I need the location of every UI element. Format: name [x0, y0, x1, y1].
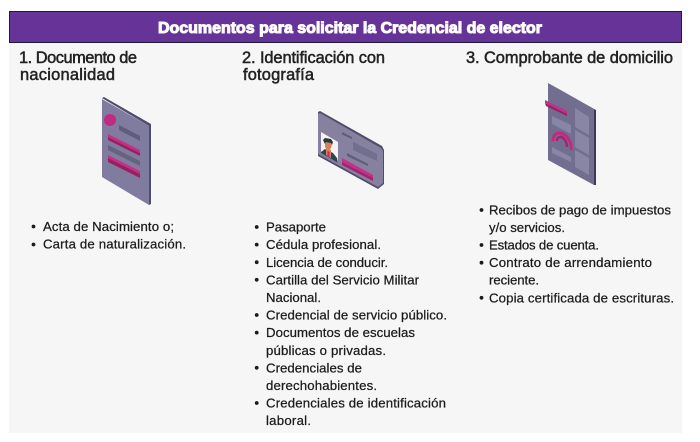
- column 1 heading: nacionalidad: [20, 66, 115, 84]
- list: photo identification documents: laboral.: [266, 413, 311, 428]
- icon: ID card with photo: [318, 111, 384, 189]
- list: photo identification documents: Cartilla del Servicio Militar: [266, 272, 420, 287]
- list: photo identification documents: derechohabientes.: [266, 378, 377, 393]
- column 2 heading: 2. Identificación con: [242, 49, 385, 67]
- title banner: Documentos para solicitar la Credencial de elector: [158, 20, 542, 37]
- list: photo identification documents: Cédula profesional.: [266, 237, 381, 252]
- column 2 heading: [242, 49, 385, 84]
- list: proof of address documents: [480, 202, 674, 305]
- column 2 heading: fotografía: [243, 66, 315, 84]
- title banner: [10, 12, 682, 42]
- list: photo identification documents: Credenciales de: [266, 360, 362, 375]
- column 1 heading: [19, 49, 137, 84]
- list: photo identification documents: Licencia de conducir.: [266, 255, 388, 270]
- list: nationality documents: Acta de Nacimiento o;: [43, 219, 174, 234]
- photo: [321, 132, 338, 163]
- list: photo identification documents: Credencial de servicio público.: [266, 308, 447, 323]
- icon: proof of address document: [545, 83, 596, 185]
- list: photo identification documents: Documentos de escuelas: [266, 325, 415, 340]
- list: proof of address documents: reciente.: [489, 273, 539, 288]
- list: nationality documents: Carta de naturalización.: [43, 237, 186, 252]
- list: proof of address documents: Contrato de arrendamiento: [489, 255, 652, 270]
- icon: nationality document: [102, 97, 151, 205]
- list: proof of address documents: Estados de cuenta.: [489, 238, 599, 252]
- column 3 heading: 3. Comprobante de domicilio: [466, 49, 673, 67]
- column 1 heading: 1. Documento de: [19, 49, 137, 67]
- list: photo identification documents: Credenciales de identificación: [266, 396, 446, 411]
- list: photo identification documents: Pasaporte: [266, 220, 326, 235]
- list: photo identification documents: [255, 220, 447, 428]
- list: photo identification documents: públicas o privadas.: [266, 343, 386, 358]
- list: nationality documents: [32, 219, 186, 252]
- list: proof of address documents: y/o servicios.: [489, 220, 565, 235]
- list: photo identification documents: Nacional.: [266, 290, 321, 305]
- list: proof of address documents: Copia certificada de escrituras.: [489, 290, 674, 305]
- list: proof of address documents: Recibos de pago de impuestos: [489, 202, 671, 217]
